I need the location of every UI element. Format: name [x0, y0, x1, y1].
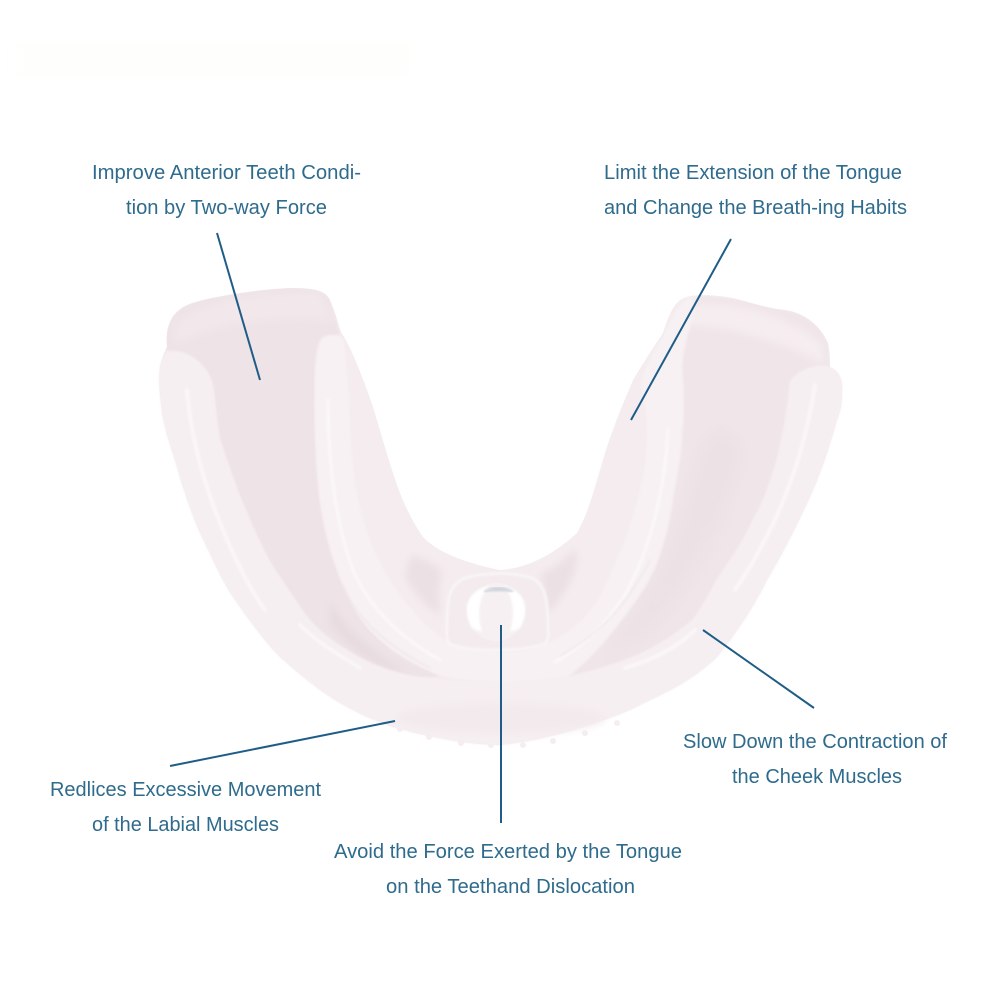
callout: labial muscles: of the Labial Muscles — [92, 814, 279, 836]
inner wall — [315, 296, 694, 682]
soft interior shading — [166, 300, 432, 676]
callout: anterior teeth — [92, 162, 361, 380]
plate shadow left — [330, 600, 410, 672]
bottom nubs — [397, 720, 620, 748]
callout: cheek muscles: the Cheek Muscles — [732, 766, 902, 788]
callout: anterior teeth: Improve Anterior Teeth Condi- — [92, 162, 361, 184]
plate shadow right — [600, 430, 740, 665]
mouthguard — [159, 288, 842, 748]
back plate highlight right — [680, 304, 825, 365]
callout: anterior teeth: tion by Two-way Force — [126, 197, 327, 219]
callout: tongue force: on the Teethand Dislocation — [386, 876, 635, 898]
outer rim — [159, 352, 842, 745]
left plate — [165, 288, 440, 677]
rim front band — [395, 702, 605, 734]
floor shadow right — [544, 558, 574, 606]
callout: labial muscles — [50, 721, 395, 836]
inner wall streaks — [328, 400, 668, 668]
callout: tongue force — [334, 625, 682, 898]
callout: tongue extension: and Change the Breath-ing Habits — [604, 197, 907, 219]
right plate — [567, 296, 830, 677]
body silhouette — [159, 288, 842, 745]
back plate highlight left — [175, 292, 335, 345]
callout: tongue force: Avoid the Force Exerted by the Tongue — [334, 841, 682, 863]
callout: cheek muscles — [683, 630, 947, 788]
callout: cheek muscles: Slow Down the Contraction of — [683, 731, 947, 753]
rim highlights — [187, 385, 815, 668]
tongue bump — [447, 574, 548, 650]
faint background smudge — [16, 42, 411, 78]
callout: tongue extension: Limit the Extension of the Tongue — [604, 162, 902, 184]
callout: labial muscles: Redlices Excessive Movement — [50, 779, 321, 801]
callout: tongue extension — [604, 162, 907, 420]
floor shadow left — [408, 560, 439, 606]
